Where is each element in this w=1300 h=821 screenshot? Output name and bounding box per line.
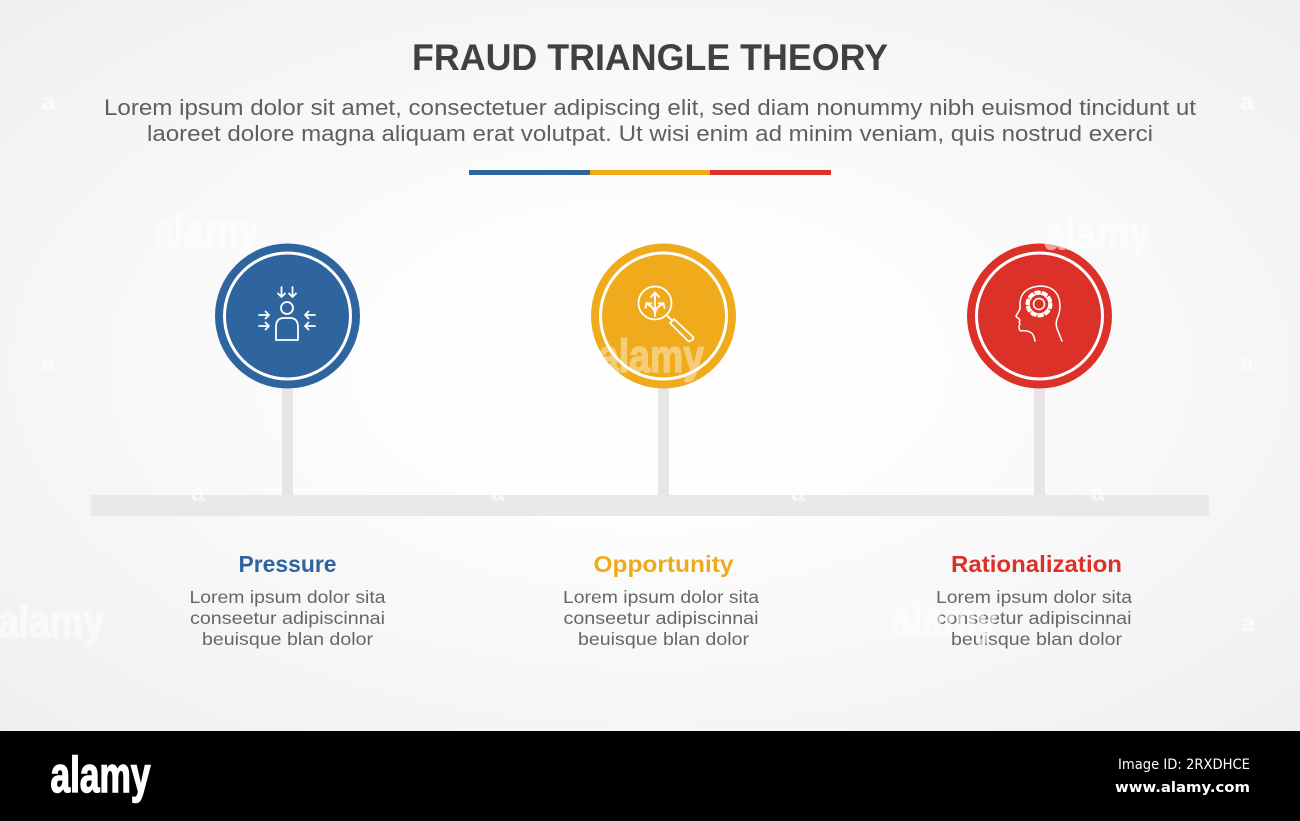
watermarks: a — [791, 480, 805, 507]
description: rationalization: beuisque blan dolor — [951, 629, 1122, 649]
footer image id and site — [1115, 757, 1250, 796]
footer image id and site: www.alamy.com — [1115, 780, 1250, 796]
watermarks: a — [491, 480, 505, 507]
watermarks — [0, 89, 1255, 647]
watermarks: alamy — [891, 593, 997, 645]
column: rationalization — [936, 244, 1132, 649]
heading: opportunity: Opportunity — [594, 551, 734, 577]
description: opportunity: beuisque blan dolor — [578, 629, 749, 649]
heading: rationalization: Rationalization — [951, 551, 1122, 577]
watermarks: a — [41, 89, 55, 116]
icon: person under pressure — [259, 287, 315, 340]
description: opportunity: Lorem ipsum dolor sita — [563, 587, 759, 607]
description: pressure: conseetur adipiscinnai — [190, 608, 385, 628]
description: opportunity — [563, 587, 759, 649]
description: pressure: Lorem ipsum dolor sita — [190, 587, 386, 607]
watermarks: a — [41, 350, 55, 377]
watermarks: alamy — [1044, 207, 1150, 259]
intro paragraph — [104, 95, 1197, 146]
connector stem: pressure — [282, 386, 293, 496]
circle badge: rationalization — [967, 244, 1112, 388]
watermarks: alamy — [598, 330, 704, 382]
column: opportunity — [563, 244, 759, 649]
watermarks: a — [1241, 610, 1255, 637]
intro paragraph: Lorem ipsum dolor sit amet, consectetuer adipiscing elit, sed diam nonummy nibh euismod tincidunt ut — [104, 95, 1197, 120]
footer bar — [0, 731, 1300, 821]
description: rationalization: conseetur adipiscinnai — [936, 608, 1132, 628]
watermarks: a — [1240, 350, 1254, 377]
title: FRAUD TRIANGLE THEORY — [412, 37, 888, 78]
description: pressure — [190, 587, 386, 649]
footer image id and site: Image ID: 2RXDHCE — [1118, 757, 1250, 773]
footer logo: alamy — [50, 747, 151, 803]
watermarks: alamy — [0, 595, 104, 647]
description: pressure: beuisque blan dolor — [202, 629, 373, 649]
column: pressure — [190, 244, 386, 649]
watermarks: a — [1240, 89, 1254, 116]
description: rationalization: Lorem ipsum dolor sita — [936, 587, 1132, 607]
circle badge: pressure — [215, 244, 360, 388]
heading: pressure: Pressure — [238, 551, 336, 577]
watermarks: alamy — [153, 204, 259, 256]
icon: head with gear — [1016, 286, 1062, 341]
watermarks: a — [1091, 480, 1105, 507]
intro paragraph: laoreet dolore magna aliquam erat volutpat. Ut wisi enim ad minim veniam, quis nostrud exerci — [147, 121, 1153, 146]
circle badge: opportunity — [591, 244, 736, 388]
description: opportunity: conseetur adipiscinnai — [564, 608, 758, 628]
tricolour divider — [469, 170, 831, 175]
description: rationalization — [936, 587, 1132, 649]
connector stem: rationalization — [1034, 386, 1045, 496]
connector stem: opportunity — [658, 386, 669, 496]
icon: magnifier with diverging arrows — [638, 286, 693, 341]
watermarks: a — [191, 480, 205, 507]
timeline base bar — [91, 495, 1209, 516]
